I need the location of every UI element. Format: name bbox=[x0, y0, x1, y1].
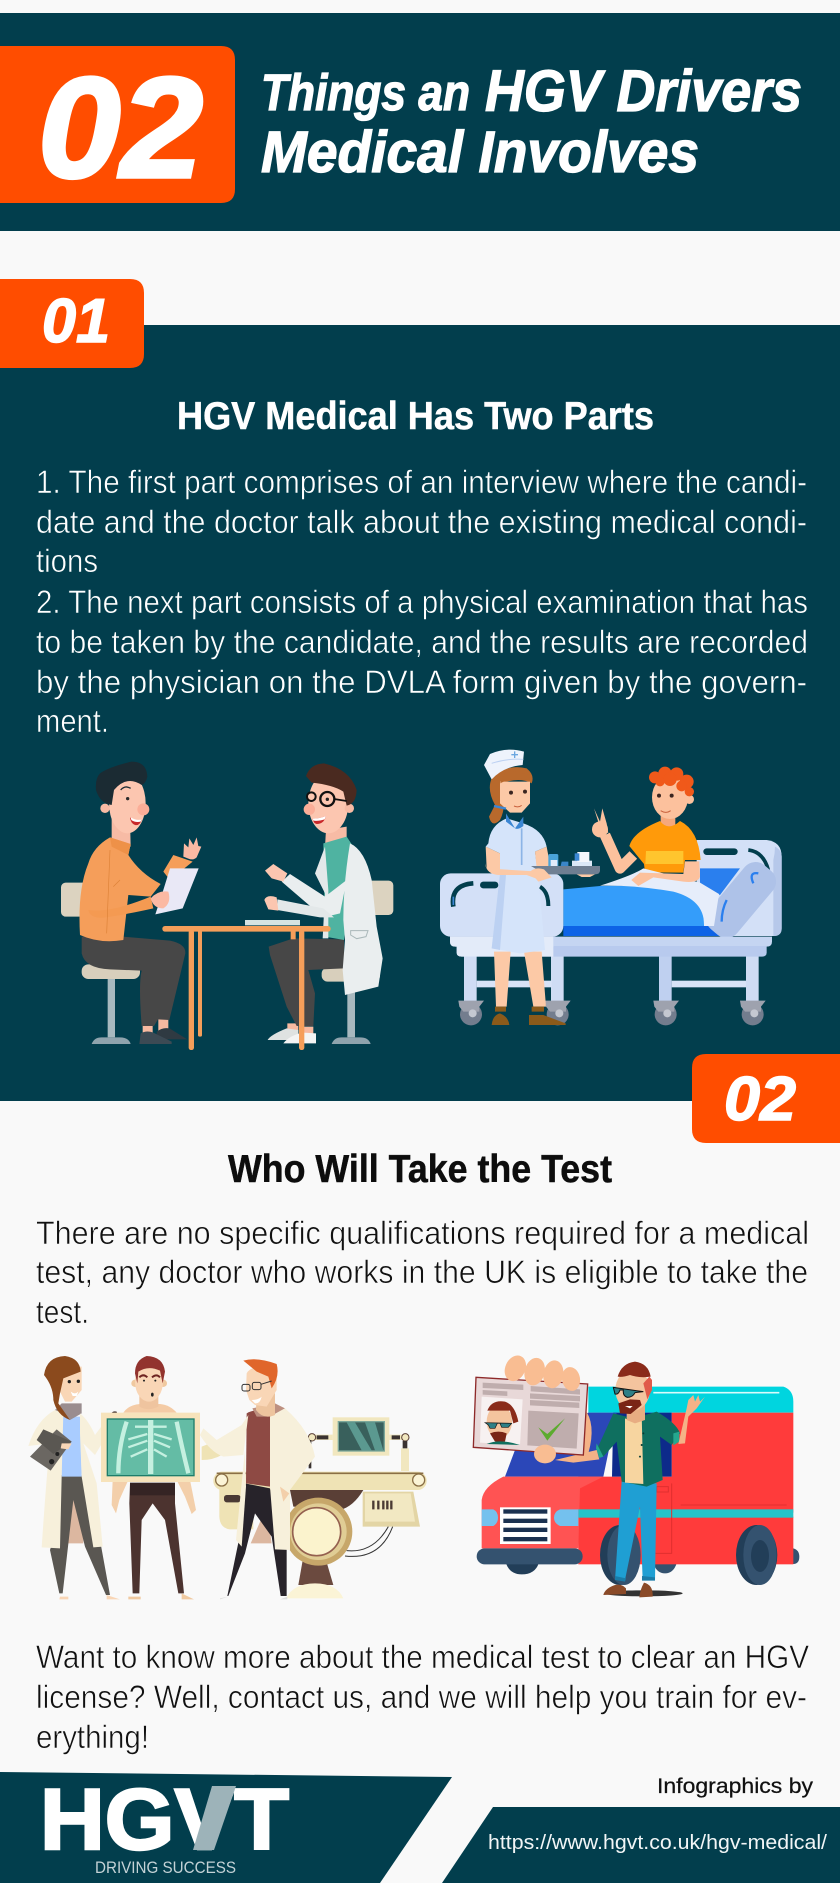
section 2 body text bbox=[36, 1215, 809, 1330]
title: Things an bbox=[261, 64, 470, 121]
table and book bbox=[162, 920, 331, 1050]
driving licence card bbox=[473, 1352, 592, 1463]
x-ray panel bbox=[101, 1413, 200, 1482]
footer url panel bbox=[442, 1807, 840, 1883]
heading: Who Will Take the Test: Who Will Take the Test bbox=[228, 1148, 612, 1191]
section 1 body text bbox=[36, 464, 808, 739]
nurse bbox=[484, 750, 566, 1025]
header number badge bbox=[0, 46, 235, 203]
section 2 body text: test. bbox=[36, 1294, 89, 1330]
illustration: nurse and patient in hospital bed bbox=[440, 750, 782, 1025]
doctor bbox=[264, 763, 383, 1043]
female doctor bbox=[28, 1356, 120, 1599]
illustration: driver with licence and van bbox=[473, 1352, 799, 1597]
title: Medical Involves bbox=[261, 120, 699, 185]
section 2 body text: test, any doctor who works in the UK is eligible to take the bbox=[36, 1254, 808, 1290]
footer logo panel bbox=[0, 1772, 452, 1883]
bedding sheet bbox=[600, 868, 719, 926]
header number: 02 bbox=[38, 49, 203, 208]
section 1 body text: tions bbox=[36, 543, 98, 579]
male doctor bbox=[200, 1359, 315, 1599]
illustration: x-ray team bbox=[28, 1356, 427, 1599]
title: HGV Drivers bbox=[485, 59, 802, 124]
hospital bed bbox=[440, 840, 782, 1025]
panel: section 1 background bbox=[0, 325, 840, 1101]
section 2 body text: There are no specific qualifications required for a medical bbox=[36, 1215, 809, 1251]
right chair bbox=[322, 881, 393, 1044]
closing text bbox=[36, 1639, 810, 1755]
section 1 body text: date and the doctor talk about the existing medical condi- bbox=[36, 504, 807, 540]
credit label: Infographics by bbox=[657, 1775, 814, 1798]
badge: section 2 number bbox=[692, 1054, 840, 1143]
candidate bbox=[79, 762, 201, 1044]
section 1 body text: to be taken by the candidate, and the results are recorded bbox=[36, 624, 808, 660]
header band bbox=[0, 13, 840, 231]
driver bbox=[555, 1362, 705, 1597]
van bbox=[477, 1387, 799, 1585]
left chair bbox=[61, 883, 140, 1044]
section 1 body text: by the physician on the DVLA form given by the govern- bbox=[36, 664, 807, 700]
section 1 body text: ment. bbox=[36, 703, 109, 739]
section 1 number badge bbox=[0, 279, 144, 368]
section 1 number badge: 01 bbox=[42, 287, 110, 356]
badge: section 2 number: 02 bbox=[724, 1065, 796, 1134]
patient resting arm bbox=[631, 861, 700, 886]
closing text: license? Well, contact us, and we will help you train for ev- bbox=[36, 1679, 807, 1715]
title bbox=[261, 59, 802, 185]
illustration: candidate and doctor interview bbox=[61, 762, 393, 1050]
logo wordmark: HGVT bbox=[40, 1772, 289, 1868]
closing text: erything! bbox=[36, 1719, 149, 1755]
logo tagline: DRIVING SUCCESS bbox=[95, 1858, 236, 1877]
heading: HGV Medical Has Two Parts: HGV Medical Has Two Parts bbox=[177, 395, 654, 438]
x-ray machine bbox=[63, 1417, 427, 1598]
patient bbox=[592, 767, 701, 873]
patient with x-ray bbox=[112, 1356, 196, 1599]
medicine tray bbox=[530, 852, 600, 882]
url: https://www.hgvt.co.uk/hgv-medical/ bbox=[488, 1832, 827, 1854]
